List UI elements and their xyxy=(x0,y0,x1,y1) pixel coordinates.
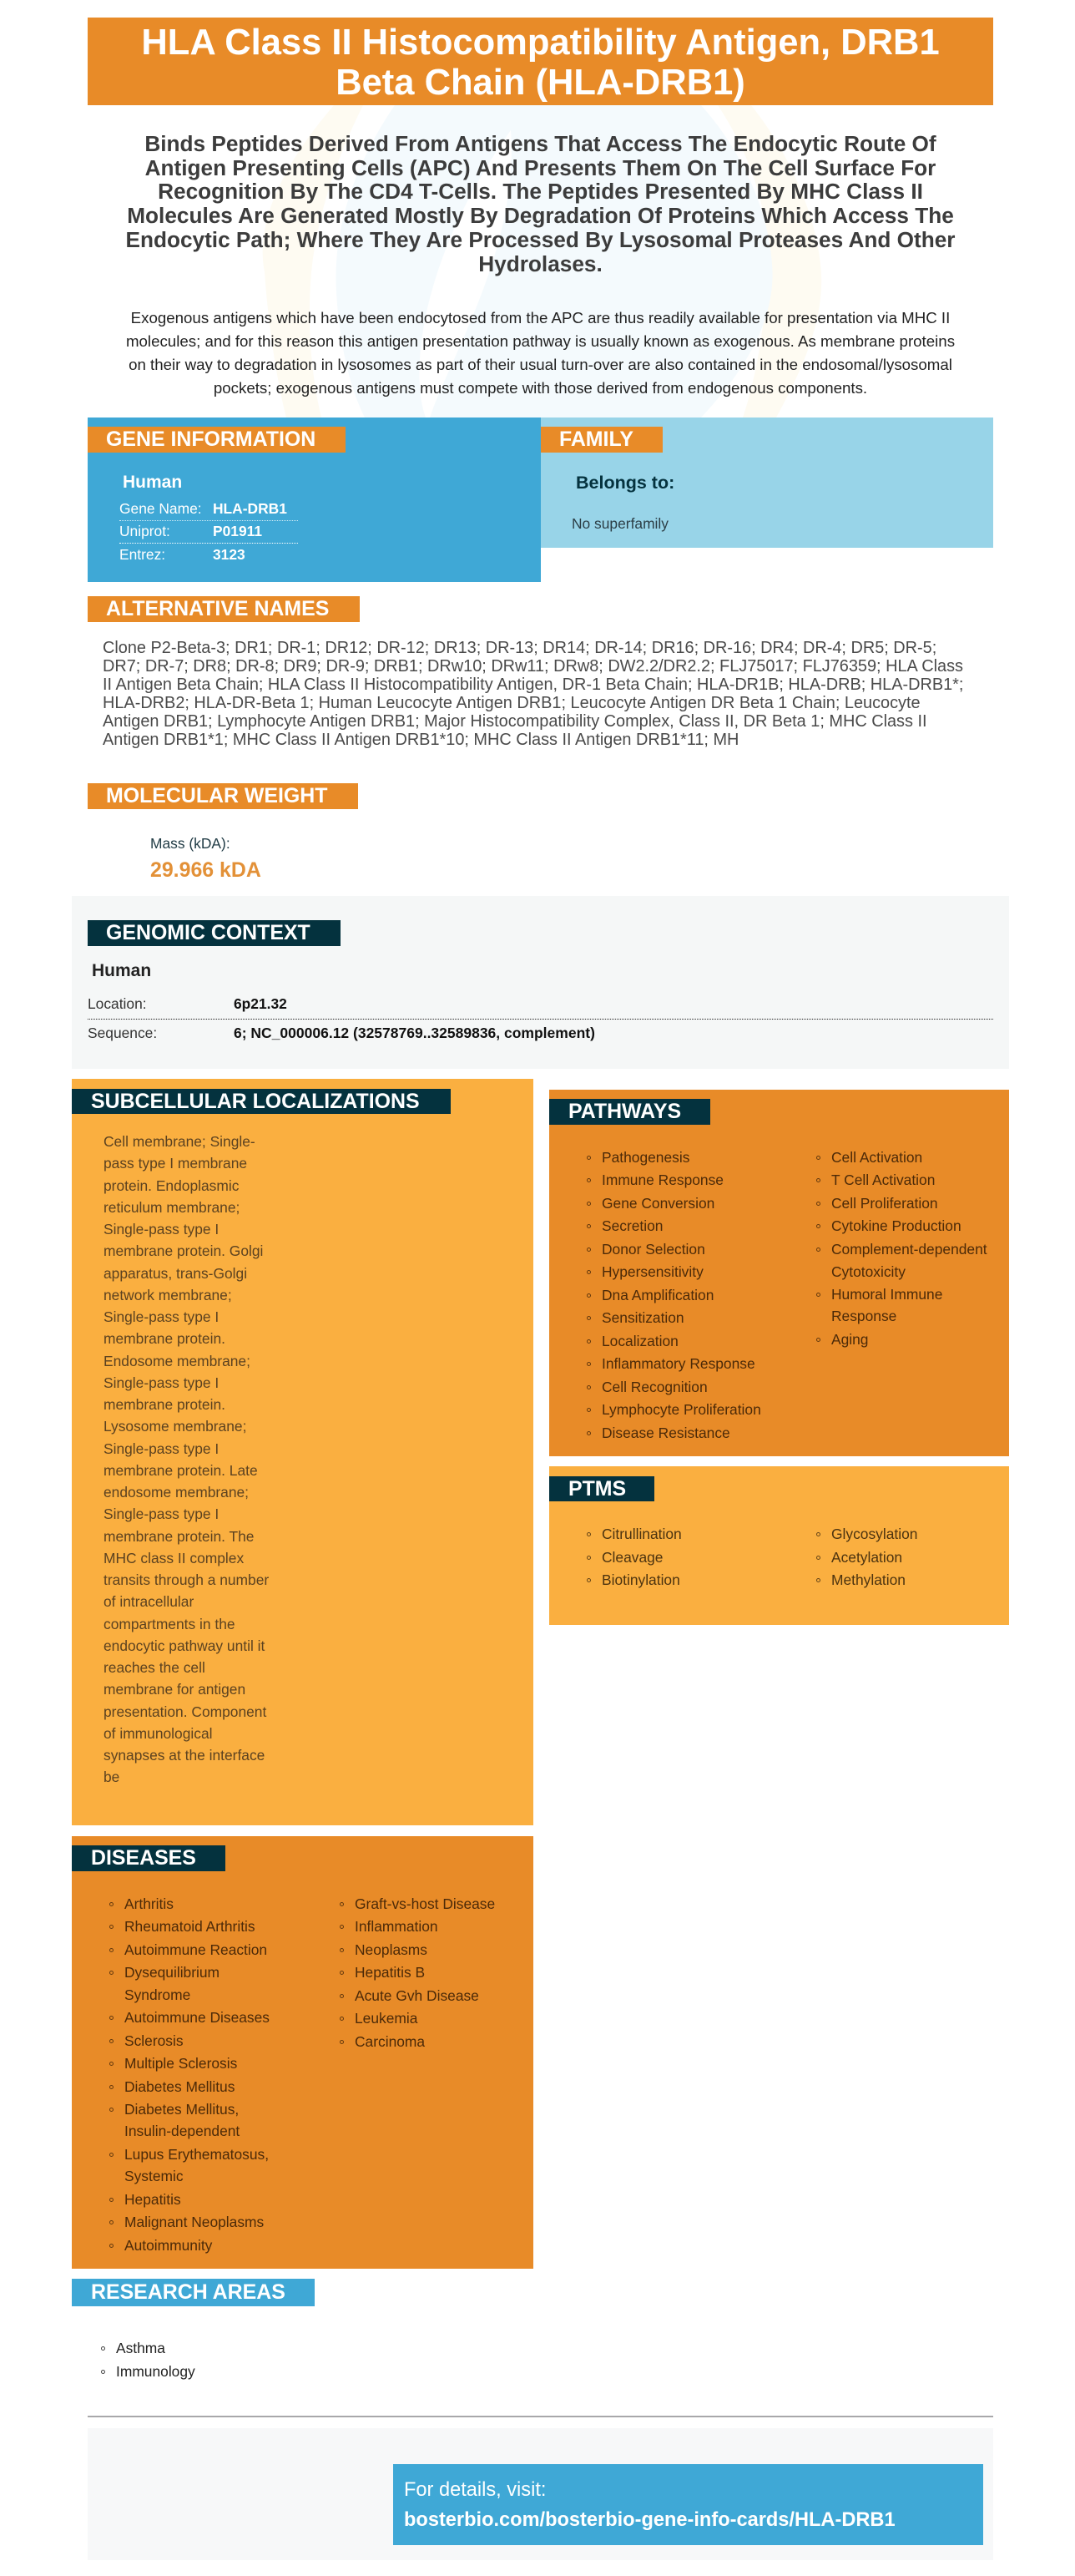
heading: research areas xyxy=(72,2279,315,2306)
description paragraph: on their way to degradation in lysosomes as part of their usual turn-over are also contained in the endosomal/lysosomal xyxy=(129,356,952,373)
pathways list column 2: Cell Proliferation xyxy=(831,1195,938,1212)
diseases list column 1: Malignant Neoplasms xyxy=(124,2214,264,2230)
localization text: membrane protein. Golgi xyxy=(103,1242,263,1259)
gene details table: Uniprot: xyxy=(119,523,170,539)
pathways list column 1: Localization xyxy=(602,1333,679,1349)
gene details table: HLA-DRB1 xyxy=(213,500,287,517)
heading: ptms xyxy=(549,1476,654,1501)
localization text: endosome membrane; xyxy=(103,1484,249,1501)
alternative names text xyxy=(103,639,963,749)
species label: Human xyxy=(92,961,151,980)
pathways list column 1: Secretion xyxy=(602,1217,663,1234)
localization text: Cell membrane; Single- xyxy=(103,1133,255,1150)
species label: Human xyxy=(123,473,182,492)
callout: details link xyxy=(393,2464,983,2545)
subtitle: Recognition By The CD4 T-Cells. The Peptides Presented By MHC Class II xyxy=(158,179,923,204)
heading: pathways: PATHWAYS xyxy=(568,1100,681,1123)
callout: details link: For details, visit: xyxy=(404,2479,546,2501)
localization text: Lysosome membrane; xyxy=(103,1418,246,1435)
diseases list column 1: Syndrome xyxy=(124,1986,190,2003)
panel: family xyxy=(541,418,993,548)
superfamily value: No superfamily xyxy=(572,515,669,532)
localization text: membrane protein. xyxy=(103,1396,225,1413)
heading: genomic context: GENOMIC CONTEXT xyxy=(106,921,310,944)
diseases list column 1: Dysequilibrium xyxy=(124,1964,220,1981)
location row: 6p21.32 xyxy=(234,995,287,1012)
alternative names text: II Antigen Beta Chain; HLA Class II Histocompatibility Antigen, DR-1 Beta Chain; HLA-DR1B; HLA-DRB; HLA-DRB1*; xyxy=(103,676,963,694)
title banner: Beta Chain (HLA-DRB1) xyxy=(336,63,745,103)
diseases list column 2: Neoplasms xyxy=(355,1941,427,1958)
localization text: presentation. Component xyxy=(103,1703,266,1720)
localization text: reaches the cell xyxy=(103,1659,205,1676)
diseases list column 1: Hepatitis xyxy=(124,2191,181,2208)
heading: molecular weight: MOLECULAR WEIGHT xyxy=(106,784,327,807)
diseases list column 2 xyxy=(340,1895,495,2050)
heading: ptms: PTMS xyxy=(568,1477,626,1501)
diseases list column 2: Hepatitis B xyxy=(355,1964,425,1981)
mass label: Mass (kDA): xyxy=(150,835,230,852)
gene details table: 3123 xyxy=(213,546,245,563)
heading: diseases: DISEASES xyxy=(91,1846,196,1870)
ptms list column 1: Biotinylation xyxy=(602,1571,680,1588)
localization text: Single-pass type I xyxy=(103,1374,219,1391)
heading: diseases xyxy=(72,1845,225,1871)
localization text: membrane protein. xyxy=(103,1330,225,1347)
alternative names text: Clone P2-Beta-3; DR1; DR-1; DR12; DR-12; DR13; DR-13; DR14; DR-14; DR16; DR-16; DR4; DR-4; DR5; DR-5; xyxy=(103,639,936,657)
diseases list column 1: Sclerosis xyxy=(124,2032,184,2049)
title banner xyxy=(88,18,993,105)
belongs to label: Belongs to: xyxy=(576,473,674,493)
diseases list column 1: Insulin-dependent xyxy=(124,2123,240,2139)
ptms list column 1: Cleavage xyxy=(602,1549,663,1566)
localization text: pass type I membrane xyxy=(103,1155,247,1172)
pathways list column 2: Cytotoxicity xyxy=(831,1263,906,1280)
callout: details link: bosterbio.com/bosterbio-gene-info-cards/HLA-DRB1 xyxy=(404,2509,896,2531)
diseases list column 1: Diabetes Mellitus, xyxy=(124,2101,239,2118)
pathways list column 2 xyxy=(816,1149,987,1348)
alternative names text: Antigen DRB1*1; MHC Class II Antigen DRB1*10; MHC Class II Antigen DRB1*11; MH xyxy=(103,731,739,749)
alternative names text: Antigen DRB1; Lymphocyte Antigen DRB1; Major Histocompatibility Complex, Class II, DR Beta 1; MHC Class II xyxy=(103,712,927,731)
panel: genomic context xyxy=(72,896,1009,1069)
diseases list column 2: Leukemia xyxy=(355,2010,417,2027)
pathways list column 2: Complement-dependent xyxy=(831,1241,987,1258)
panel: gene information xyxy=(88,418,541,582)
localization text: of intracellular xyxy=(103,1593,194,1610)
description paragraph: molecules; and for this reason this antigen presentation pathway is usually known as exogenous. As membrane proteins xyxy=(126,332,955,350)
pathways list column 1 xyxy=(587,1149,761,1441)
diseases list column 2: Graft-vs-host Disease xyxy=(355,1895,495,1912)
pathways list column 2: Cell Activation xyxy=(831,1149,922,1166)
heading: gene information: GENE INFORMATION xyxy=(106,428,315,451)
localization text: compartments in the xyxy=(103,1615,235,1632)
location row xyxy=(88,995,287,1012)
ptms list column 2: Glycosylation xyxy=(831,1526,917,1542)
description paragraph xyxy=(126,309,955,397)
localization text xyxy=(103,1133,269,1785)
localization text: Single-pass type I xyxy=(103,1506,219,1522)
gene details table xyxy=(119,500,298,563)
ptms list column 2 xyxy=(816,1526,917,1588)
pathways list column 2: Response xyxy=(831,1308,896,1324)
diseases list column 1: Systemic xyxy=(124,2168,184,2184)
description paragraph: Exogenous antigens which have been endocytosed from the APC are thus readily available for presentation via MHC II xyxy=(131,309,950,326)
diseases list column 1: Rheumatoid Arthritis xyxy=(124,1918,255,1935)
diseases list column 1: Multiple Sclerosis xyxy=(124,2055,237,2072)
localization text: Single-pass type I xyxy=(103,1308,219,1325)
localization text: synapses at the interface xyxy=(103,1747,265,1764)
localization text: MHC class II complex xyxy=(103,1550,244,1566)
research areas list xyxy=(101,2340,195,2380)
pathways list column 1: Dna Amplification xyxy=(602,1287,714,1303)
localization text: membrane for antigen xyxy=(103,1681,245,1698)
localization text: of immunological xyxy=(103,1725,212,1742)
ptms list column 2: Acetylation xyxy=(831,1549,902,1566)
gene details table: P01911 xyxy=(213,523,262,539)
panel: footer xyxy=(88,2428,993,2560)
localization text: apparatus, trans-Golgi xyxy=(103,1264,247,1281)
subtitle xyxy=(125,131,955,276)
ptms list column 1 xyxy=(587,1526,682,1588)
subtitle: Endocytic Path; Where They Are Processed By Lysosomal Proteases And Other xyxy=(125,227,955,252)
heading: subcellular localizations: SUBCELLULAR LOCALIZATIONS xyxy=(91,1090,420,1113)
alternative names text: HLA-DRB2; HLA-DR-Beta 1; Human Leucocyte Antigen DRB1; Leucocyte Antigen DR Beta 1 Chain; Leucocyte xyxy=(103,694,921,712)
pathways list column 1: Lymphocyte Proliferation xyxy=(602,1401,761,1418)
gene details table: Entrez: xyxy=(119,546,165,563)
heading: research areas: RESEARCH AREAS xyxy=(91,2280,285,2304)
panel: subcellular localizations xyxy=(72,1079,533,1825)
diseases list column 1: Autoimmunity xyxy=(124,2237,212,2254)
diseases list column 1: Lupus Erythematosus, xyxy=(124,2146,269,2163)
pathways list column 1: Sensitization xyxy=(602,1309,684,1326)
pathways list column 1: Immune Response xyxy=(602,1172,724,1188)
pathways list column 2: T Cell Activation xyxy=(831,1172,935,1188)
gene details table: Gene Name: xyxy=(119,500,202,517)
panel: diseases xyxy=(72,1836,533,2269)
heading: family xyxy=(541,427,663,453)
pathways list column 2: Humoral Immune xyxy=(831,1286,942,1303)
diseases list column 1: Arthritis xyxy=(124,1895,174,1912)
panel: ptms xyxy=(549,1466,1009,1625)
subtitle: Hydrolases. xyxy=(478,251,603,276)
diseases list column 2: Carcinoma xyxy=(355,2033,425,2050)
ptms list column 2: Methylation xyxy=(831,1571,906,1588)
description paragraph: pockets; exogenous antigens must compete with those derived from endogenous components. xyxy=(214,379,867,397)
pathways list column 1: Pathogenesis xyxy=(602,1149,689,1166)
heading: family: FAMILY xyxy=(559,428,633,451)
pathways list column 1: Inflammatory Response xyxy=(602,1355,755,1372)
pathways list column 1: Disease Resistance xyxy=(602,1425,730,1441)
subtitle: Binds Peptides Derived From Antigens That Access The Endocytic Route Of xyxy=(144,131,936,156)
sequence row: Sequence: xyxy=(88,1025,157,1041)
localization text: membrane protein. Late xyxy=(103,1462,258,1479)
heading: pathways xyxy=(549,1099,710,1125)
diseases list column 2: Acute Gvh Disease xyxy=(355,1987,479,2004)
pathways list column 1: Cell Recognition xyxy=(602,1379,708,1395)
mass value: 29.966 kDA xyxy=(150,858,261,882)
pathways list column 1: Donor Selection xyxy=(602,1241,705,1258)
pathways list column 1: Hypersensitivity xyxy=(602,1263,704,1280)
title banner: HLA Class II Histocompatibility Antigen, DRB1 xyxy=(141,23,940,63)
pathways list column 1: Gene Conversion xyxy=(602,1195,714,1212)
localization text: network membrane; xyxy=(103,1287,232,1303)
research areas list: Immunology xyxy=(116,2363,195,2380)
localization text: Single-pass type I xyxy=(103,1221,219,1237)
localization text: reticulum membrane; xyxy=(103,1199,240,1216)
subtitle: Molecules Are Generated Mostly By Degradation Of Proteins Which Access The xyxy=(127,203,954,228)
diseases list column 1 xyxy=(109,1895,270,2254)
location row: Location: xyxy=(88,995,147,1012)
diseases list column 2: Inflammation xyxy=(355,1918,438,1935)
research areas list: Asthma xyxy=(116,2340,165,2356)
diseases list column 1: Diabetes Mellitus xyxy=(124,2078,235,2095)
pathways list column 2: Cytokine Production xyxy=(831,1217,961,1234)
ptms list column 1: Citrullination xyxy=(602,1526,682,1542)
panel: pathways xyxy=(549,1090,1009,1456)
localization text: endocytic pathway until it xyxy=(103,1637,265,1654)
pathways list column 2: Aging xyxy=(831,1331,868,1348)
localization text: membrane protein. The xyxy=(103,1528,254,1545)
localization text: be xyxy=(103,1769,119,1785)
background watermark xyxy=(262,105,821,418)
localization text: Single-pass type I xyxy=(103,1440,219,1456)
localization text: protein. Endoplasmic xyxy=(103,1177,239,1194)
heading: alternative names: ALTERNATIVE NAMES xyxy=(106,597,329,620)
sequence row: 6; NC_000006.12 (32578769..32589836, complement) xyxy=(234,1025,595,1041)
localization text: Endosome membrane; xyxy=(103,1353,250,1369)
alternative names text: DR7; DR-7; DR8; DR-8; DR9; DR-9; DRB1; DRw10; DRw11; DRw8; DW2.2/DR2.2; FLJ75017; FLJ76359; HLA Class xyxy=(103,657,963,676)
diseases list column 1: Autoimmune Reaction xyxy=(124,1941,267,1958)
localization text: transits through a number xyxy=(103,1571,269,1588)
subtitle: Antigen Presenting Cells (APC) And Presents Them On The Cell Surface For xyxy=(145,155,936,180)
diseases list column 1: Autoimmune Diseases xyxy=(124,2009,270,2026)
